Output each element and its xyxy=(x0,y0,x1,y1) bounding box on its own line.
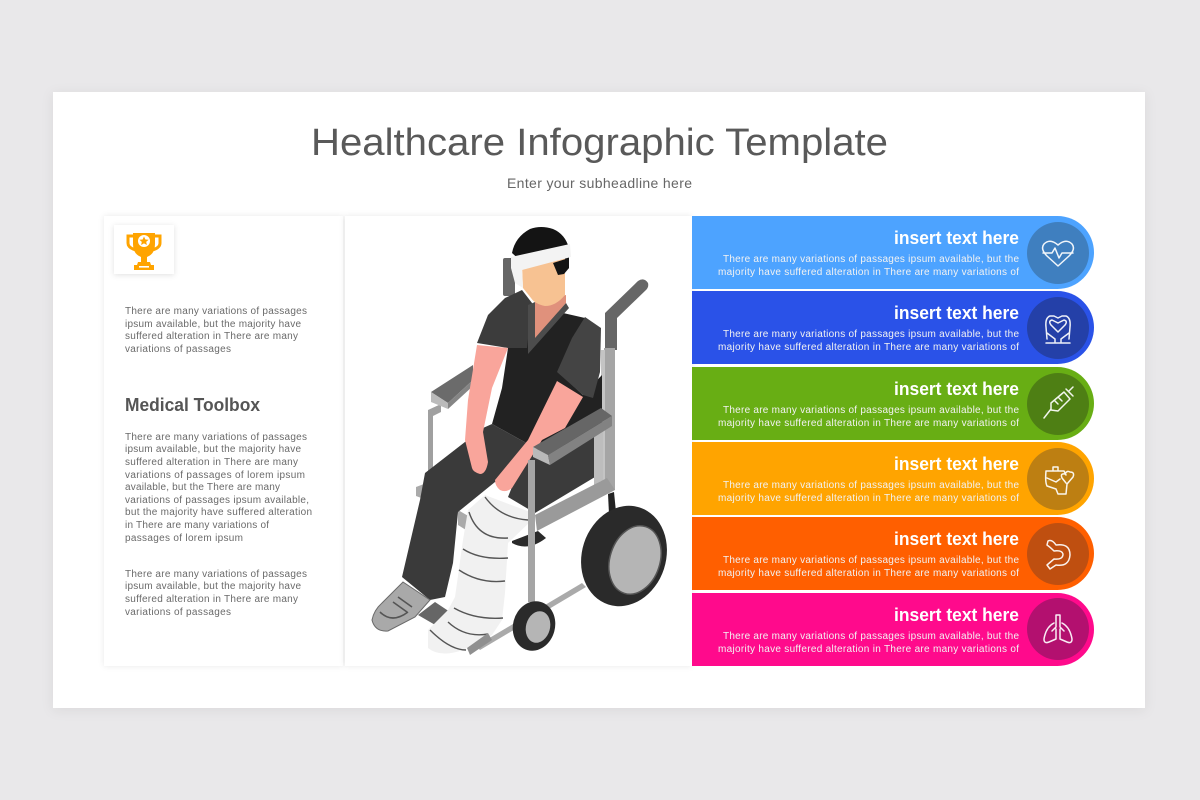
text block: details: passages of lorem ipsum xyxy=(125,533,243,544)
icon: syringe xyxy=(1044,387,1073,418)
row 1: blue banner: majority have suffered alteration in There are many variations of xyxy=(718,267,1019,278)
row 3: green banner xyxy=(692,367,1094,440)
text block: details: available, but the There are many xyxy=(125,482,280,493)
icon: trophy card xyxy=(114,225,174,274)
row 4: amber banner: majority have suffered alteration in There are many variations of xyxy=(718,493,1019,504)
text block: closing: ipsum available, but the majority have xyxy=(125,581,301,592)
text block: closing: suffered alteration in There are many xyxy=(125,594,298,605)
near armrest and post xyxy=(528,408,612,602)
row 6: magenta banner: insert text here xyxy=(894,605,1019,625)
text block: intro xyxy=(125,306,307,355)
row 5: orange banner xyxy=(692,517,1094,590)
icon: medicine bag with heart xyxy=(1046,467,1074,494)
man right leg in trousers xyxy=(402,424,545,600)
row 5: orange banner: There are many variations of passages ipsum available, but the xyxy=(723,555,1019,566)
man left shoe xyxy=(372,582,450,631)
row 3: green banner: majority have suffered alteration in There are many variations of xyxy=(718,418,1019,429)
wheelchair back frame and wheels xyxy=(416,258,680,650)
man left arm xyxy=(465,345,508,474)
slide background panel xyxy=(53,92,1145,708)
left armrest xyxy=(431,365,473,409)
row 1: blue banner: insert text here xyxy=(894,228,1019,248)
text block: details: ipsum available, but the majority have xyxy=(125,444,301,455)
row 1: blue banner: There are many variations of passages ipsum available, but the xyxy=(723,254,1019,265)
text block: details xyxy=(125,432,312,544)
text block: intro: suffered alteration in There are many xyxy=(125,331,298,342)
text block: intro: variations of passages xyxy=(125,344,231,355)
row 5: orange banner: insert text here xyxy=(894,529,1019,549)
man right arm xyxy=(495,381,583,491)
text block: details: in There are many variations of xyxy=(125,520,269,531)
text block: closing xyxy=(125,569,307,618)
text block: intro: ipsum available, but the majority have xyxy=(125,319,301,330)
row 4: amber banner: There are many variations of passages ipsum available, but the xyxy=(723,480,1019,491)
text block: details: There are many variations of passages xyxy=(125,432,307,443)
text block: closing: variations of passages xyxy=(125,607,231,618)
text block: intro: There are many variations of passages xyxy=(125,306,307,317)
text block: details: variations of passages of lorem ipsum xyxy=(125,470,305,481)
small front wheel xyxy=(507,596,561,656)
panel: illustration card xyxy=(345,216,692,666)
row 1: blue banner xyxy=(692,216,1094,289)
row 2: dark blue banner xyxy=(692,291,1094,364)
text block: details: variations of passages ipsum available, xyxy=(125,495,309,506)
man torso and head xyxy=(477,227,602,445)
icon: heartbeat xyxy=(1043,241,1073,266)
panel: medical toolbox xyxy=(104,216,343,666)
row 2: dark blue banner: insert text here xyxy=(894,303,1019,323)
leg cast xyxy=(428,495,530,655)
icon: stomach xyxy=(1047,540,1070,569)
title: Healthcare Infographic Template xyxy=(311,122,888,164)
row 6: magenta banner xyxy=(692,593,1094,666)
row 4: amber banner: insert text here xyxy=(894,454,1019,474)
text block: details: but the majority have suffered alteration xyxy=(125,507,312,518)
row 6: magenta banner: majority have suffered alteration in There are many variations of xyxy=(718,644,1019,655)
text block: details: suffered alteration in There are many xyxy=(125,457,298,468)
row 2: dark blue banner: There are many variations of passages ipsum available, but the xyxy=(723,329,1019,340)
icon: hands holding heart xyxy=(1046,316,1070,343)
heading: medical toolbox: Medical Toolbox xyxy=(125,395,260,415)
row 3: green banner: There are many variations of passages ipsum available, but the xyxy=(723,405,1019,416)
row 3: green banner: insert text here xyxy=(894,379,1019,399)
icon: lungs xyxy=(1044,615,1072,643)
row 6: magenta banner: There are many variations of passages ipsum available, but the xyxy=(723,631,1019,642)
text block: closing: There are many variations of passages xyxy=(125,569,307,580)
row 2: dark blue banner: majority have suffered alteration in There are many variations of xyxy=(718,342,1019,353)
row 5: orange banner: majority have suffered alteration in There are many variations of xyxy=(718,568,1019,579)
row 4: amber banner xyxy=(692,442,1094,515)
subtitle: Enter your subheadline here xyxy=(507,175,692,191)
illustration: injured man in wheelchair xyxy=(372,227,680,656)
